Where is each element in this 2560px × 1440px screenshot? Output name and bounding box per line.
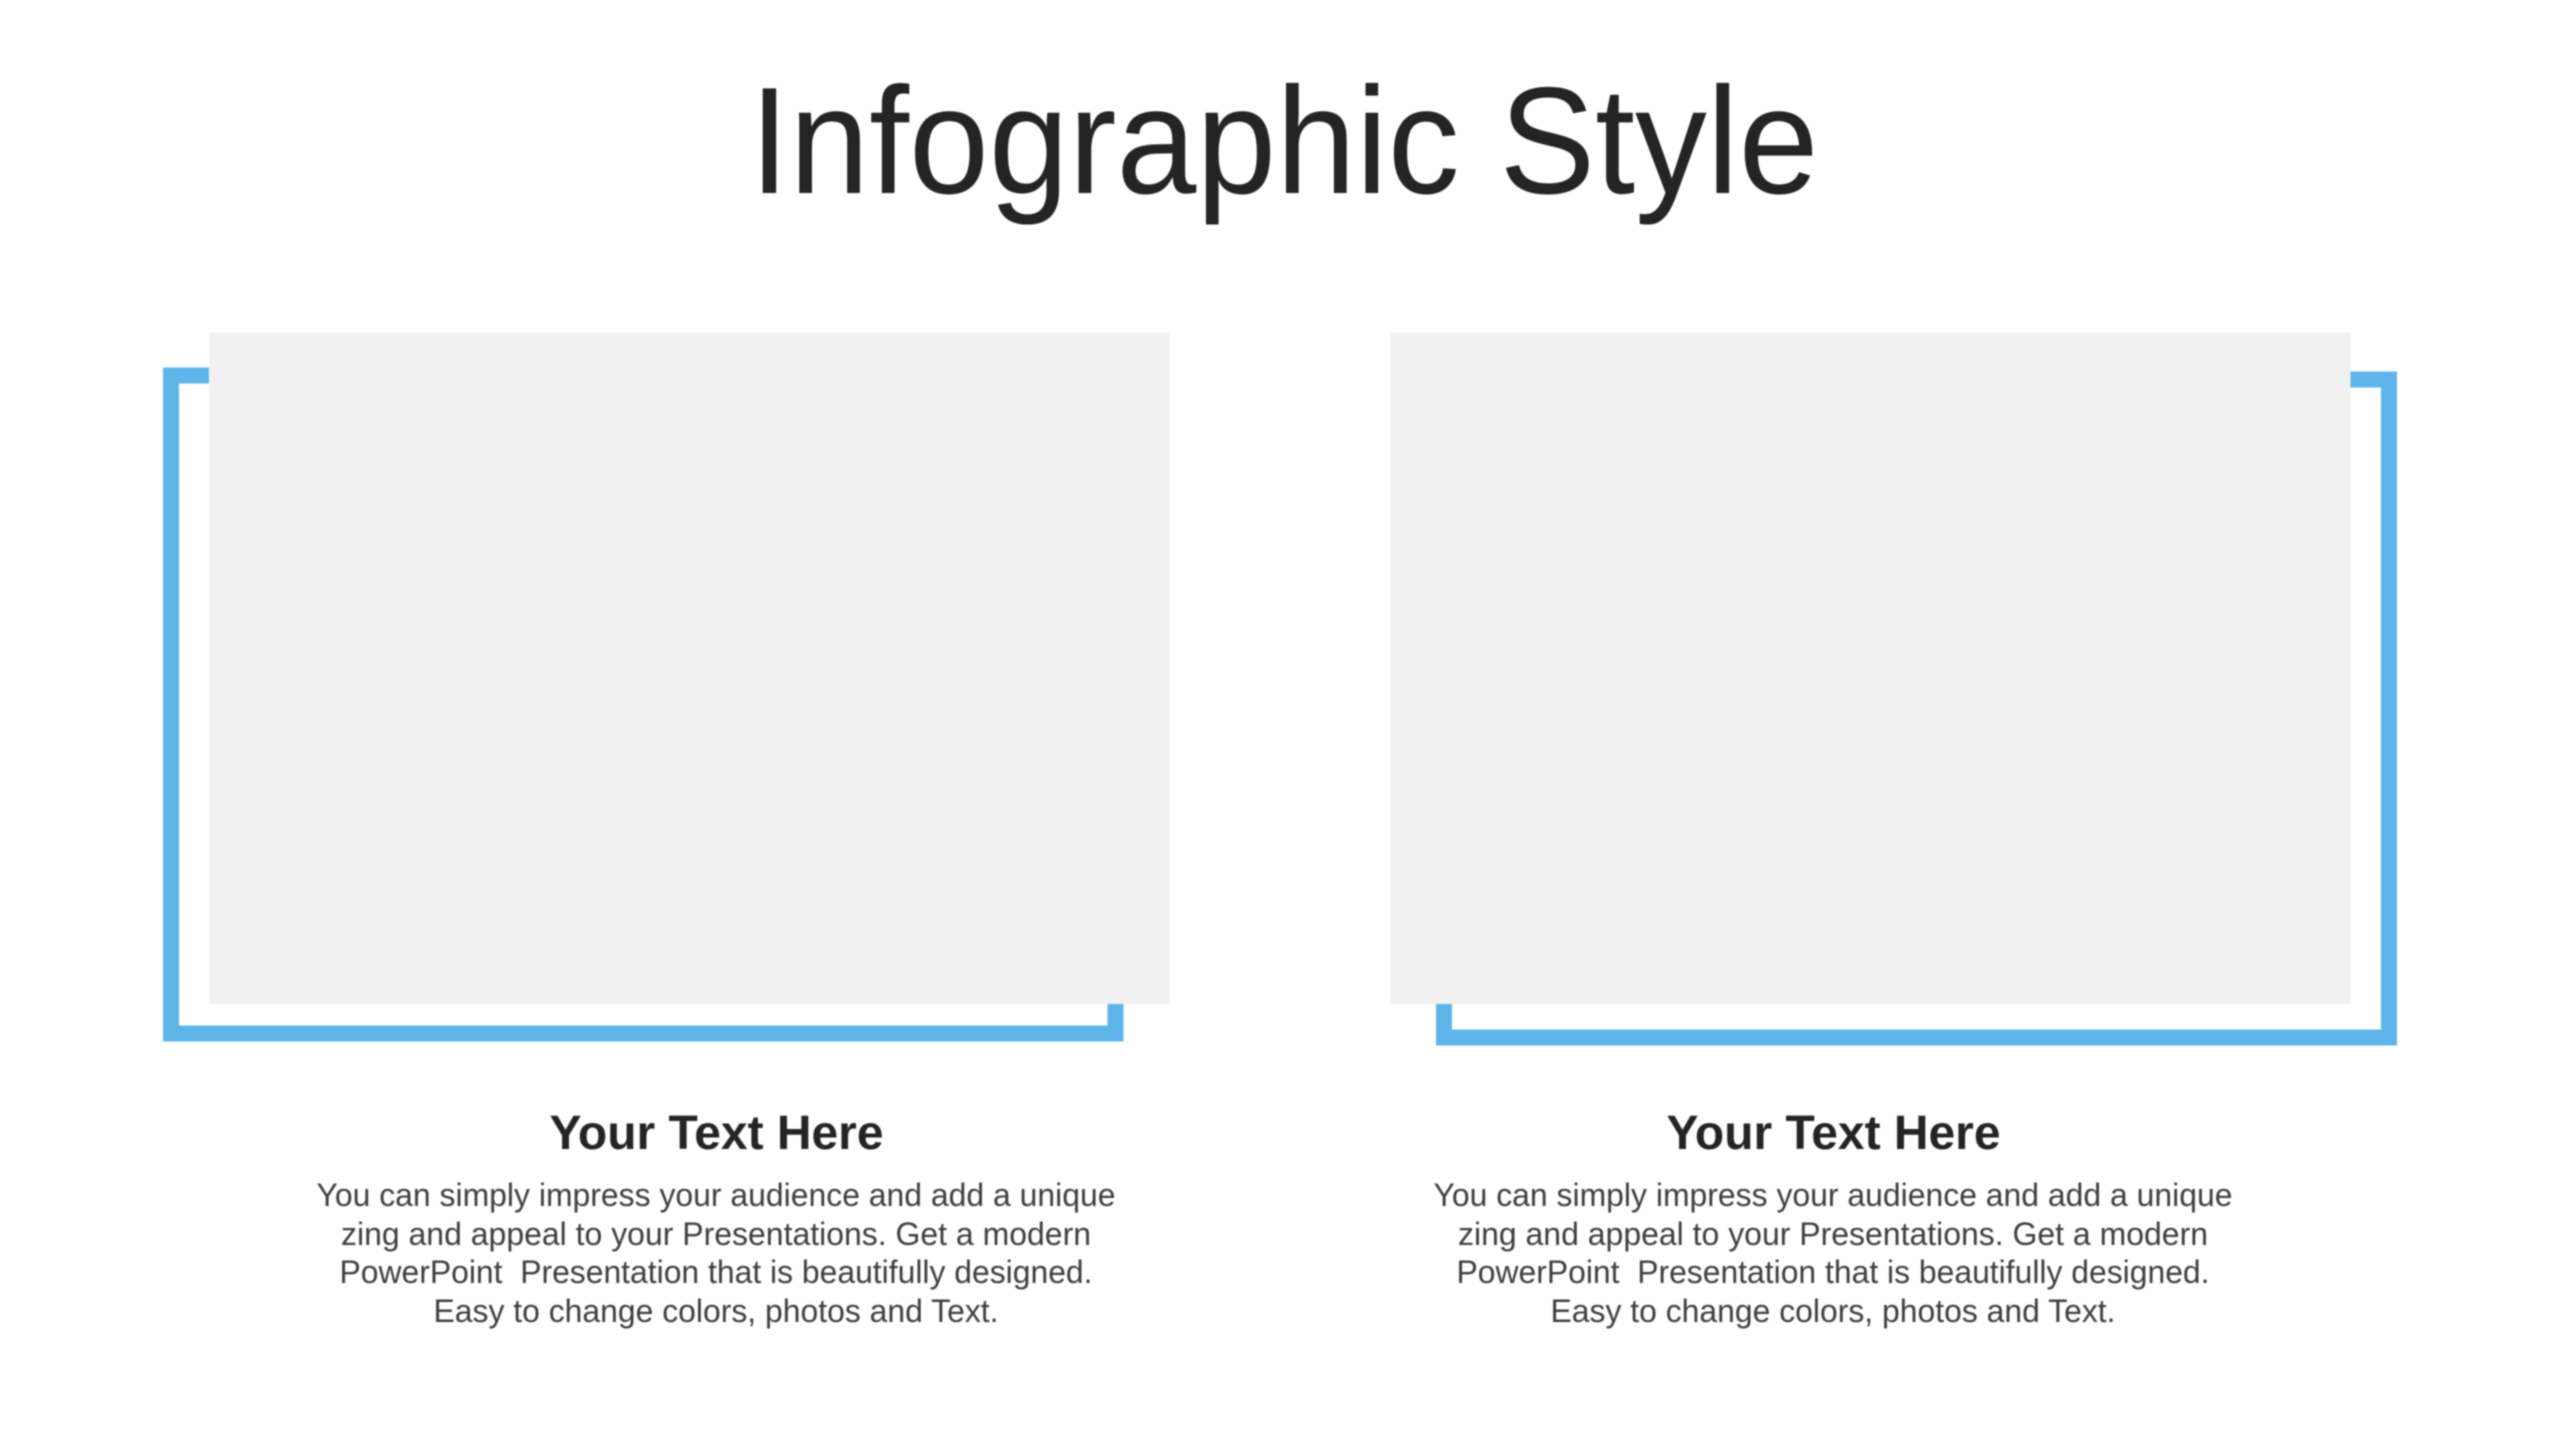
panel: right image frame (1390, 332, 2389, 1038)
body text: right caption: You can simply impress your audience and add a unique (1434, 1177, 2232, 1213)
heading: left caption: Your Text Here (550, 1107, 884, 1160)
body text: right caption (1434, 1177, 2232, 1329)
blue offset bracket, left (171, 376, 1116, 1034)
body text: left caption: Easy to change colors, photos and Text. (434, 1293, 998, 1329)
body text: right caption: zing and appeal to your Presentations. Get a modern (1458, 1216, 2208, 1252)
text block: left caption (316, 1107, 1116, 1329)
body text: right caption: Easy to change colors, photos and Text. (1550, 1293, 2116, 1329)
heading: right caption: Your Text Here (1666, 1107, 2000, 1160)
body text: left caption: You can simply impress your audience and add a unique (316, 1177, 1116, 1213)
body text: left caption (316, 1177, 1116, 1329)
grey image placeholder, left (210, 332, 1170, 1004)
text block: right caption (1434, 1107, 2232, 1329)
title: Infographic Style (750, 56, 1818, 226)
panel: left image frame (171, 332, 1170, 1034)
blue offset bracket, right (1444, 380, 2389, 1038)
body text: right caption: PowerPoint Presentation that is beautifully designed. (1456, 1254, 2210, 1290)
grey image placeholder, right (1390, 332, 2350, 1004)
body text: left caption: zing and appeal to your Presentations. Get a modern (341, 1216, 1091, 1252)
body text: left caption: PowerPoint Presentation that is beautifully designed. (340, 1254, 1092, 1290)
